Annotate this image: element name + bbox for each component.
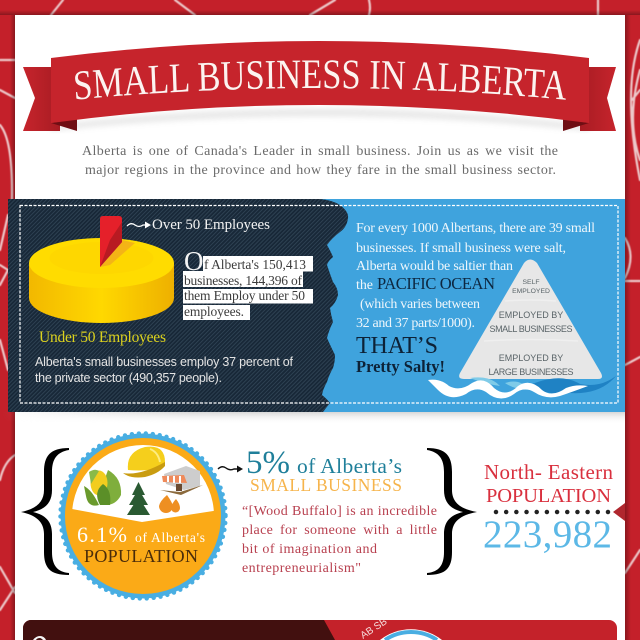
ribbon body — [51, 41, 589, 123]
wood buffalo quote: bit of imagination and — [242, 542, 377, 557]
population badge — [60, 434, 226, 598]
salt comparison text: businesses. If small business were salt, — [356, 241, 566, 256]
arrow to five percent — [218, 466, 243, 472]
wood buffalo quote — [242, 504, 437, 576]
five percent heading: 5% — [246, 445, 290, 481]
soft shadow under info panel — [39, 412, 625, 418]
bottom section panel — [23, 620, 617, 640]
right brace — [427, 448, 477, 575]
salt pyramid: SELF — [522, 279, 540, 286]
title text — [75, 60, 566, 100]
bottom badge — [380, 629, 442, 640]
five percent heading: SMALL BUSINESS — [250, 475, 402, 495]
population share text: 6.1% — [77, 522, 127, 547]
salt comparison text: For every 1000 Albertans, there are 39 small — [356, 221, 595, 236]
dark textured side with torn edge — [8, 199, 348, 412]
salt pyramid: LARGE BUSINESSES — [488, 367, 574, 377]
highlighted text block: businesses, 144,396 of — [184, 273, 302, 288]
waves — [428, 376, 616, 399]
salt comparison text: the — [356, 278, 373, 293]
title ribbon banner — [23, 41, 616, 132]
population badge: of Alberta's — [135, 530, 205, 545]
intro paragraph: Alberta is one of Canada's Leader in small business. Join us as we visit the — [82, 144, 558, 159]
highlighted text block: O — [184, 246, 204, 276]
salt comparison text: PACIFIC OCEAN — [377, 274, 495, 293]
left brace — [21, 448, 69, 575]
over 50 employees label: Over 50 Employees — [152, 217, 270, 233]
salt pyramid: EMPLOYED — [512, 288, 550, 295]
icon: hard hat — [123, 447, 165, 478]
north-eastern population stat: 223,982 — [483, 513, 612, 556]
icon: evergreen tree — [127, 482, 150, 515]
north-eastern population stat: North- Eastern — [484, 460, 614, 484]
salt comparison text: THAT’S — [356, 333, 438, 359]
north-eastern population stat — [483, 460, 614, 556]
salt comparison text: Alberta would be saltier than — [356, 259, 513, 274]
icon: oil flames — [159, 495, 180, 513]
info panel: employment and salt — [8, 199, 625, 412]
icon: storefront — [160, 466, 203, 495]
private sector statement: Alberta's small businesses employ 37 percent of — [35, 355, 294, 369]
five percent heading: of Alberta’s — [297, 454, 402, 478]
highlighted text block: f Alberta's 150,413 — [204, 257, 306, 272]
salt pyramid — [459, 260, 602, 379]
ribbon left tail — [23, 67, 60, 131]
wood buffalo quote: “[Wood Buffalo] is an incredible — [242, 504, 437, 519]
intro paragraph — [82, 144, 558, 178]
wood buffalo quote: entrepreneurialism" — [242, 561, 361, 576]
salt pyramid: EMPLOYED BY — [499, 310, 563, 320]
highlighted text block — [183, 246, 313, 320]
salt pyramid: SMALL BUSINESSES — [490, 324, 572, 334]
intro paragraph: major regions in the province and how they fare in the small business sector. — [85, 163, 556, 178]
pie chart — [29, 216, 174, 323]
red pointer triangle — [613, 503, 625, 521]
private sector statement — [35, 355, 294, 385]
salt comparison text: 32 and 37 parts/1000). — [356, 316, 475, 331]
highlighted text block: employees. — [184, 304, 244, 319]
five percent heading — [246, 445, 402, 495]
north-eastern population stat: POPULATION — [486, 485, 611, 507]
icon: corn — [84, 470, 121, 506]
salt comparison text: (which varies between — [360, 297, 480, 312]
blue side — [320, 199, 625, 412]
salt pyramid: EMPLOYED BY — [499, 353, 563, 363]
wood buffalo quote: place for someone with a little — [242, 523, 437, 538]
ribbon right tail — [580, 67, 616, 131]
population badge: POPULATION — [84, 546, 198, 566]
section heading fragment — [33, 636, 46, 640]
salt comparison text — [356, 221, 595, 376]
title text: SMALL BUSINESS IN ALBERTA — [75, 60, 566, 100]
under 50 employees label: Under 50 Employees — [39, 329, 166, 346]
arrow to over 50 label — [127, 222, 151, 228]
highlighted text block: them Employ under 50 — [184, 288, 305, 303]
dashed border — [20, 206, 618, 403]
salt comparison text: Pretty Salty! — [356, 357, 445, 376]
private sector statement: the private sector (490,357 people). — [35, 371, 222, 385]
